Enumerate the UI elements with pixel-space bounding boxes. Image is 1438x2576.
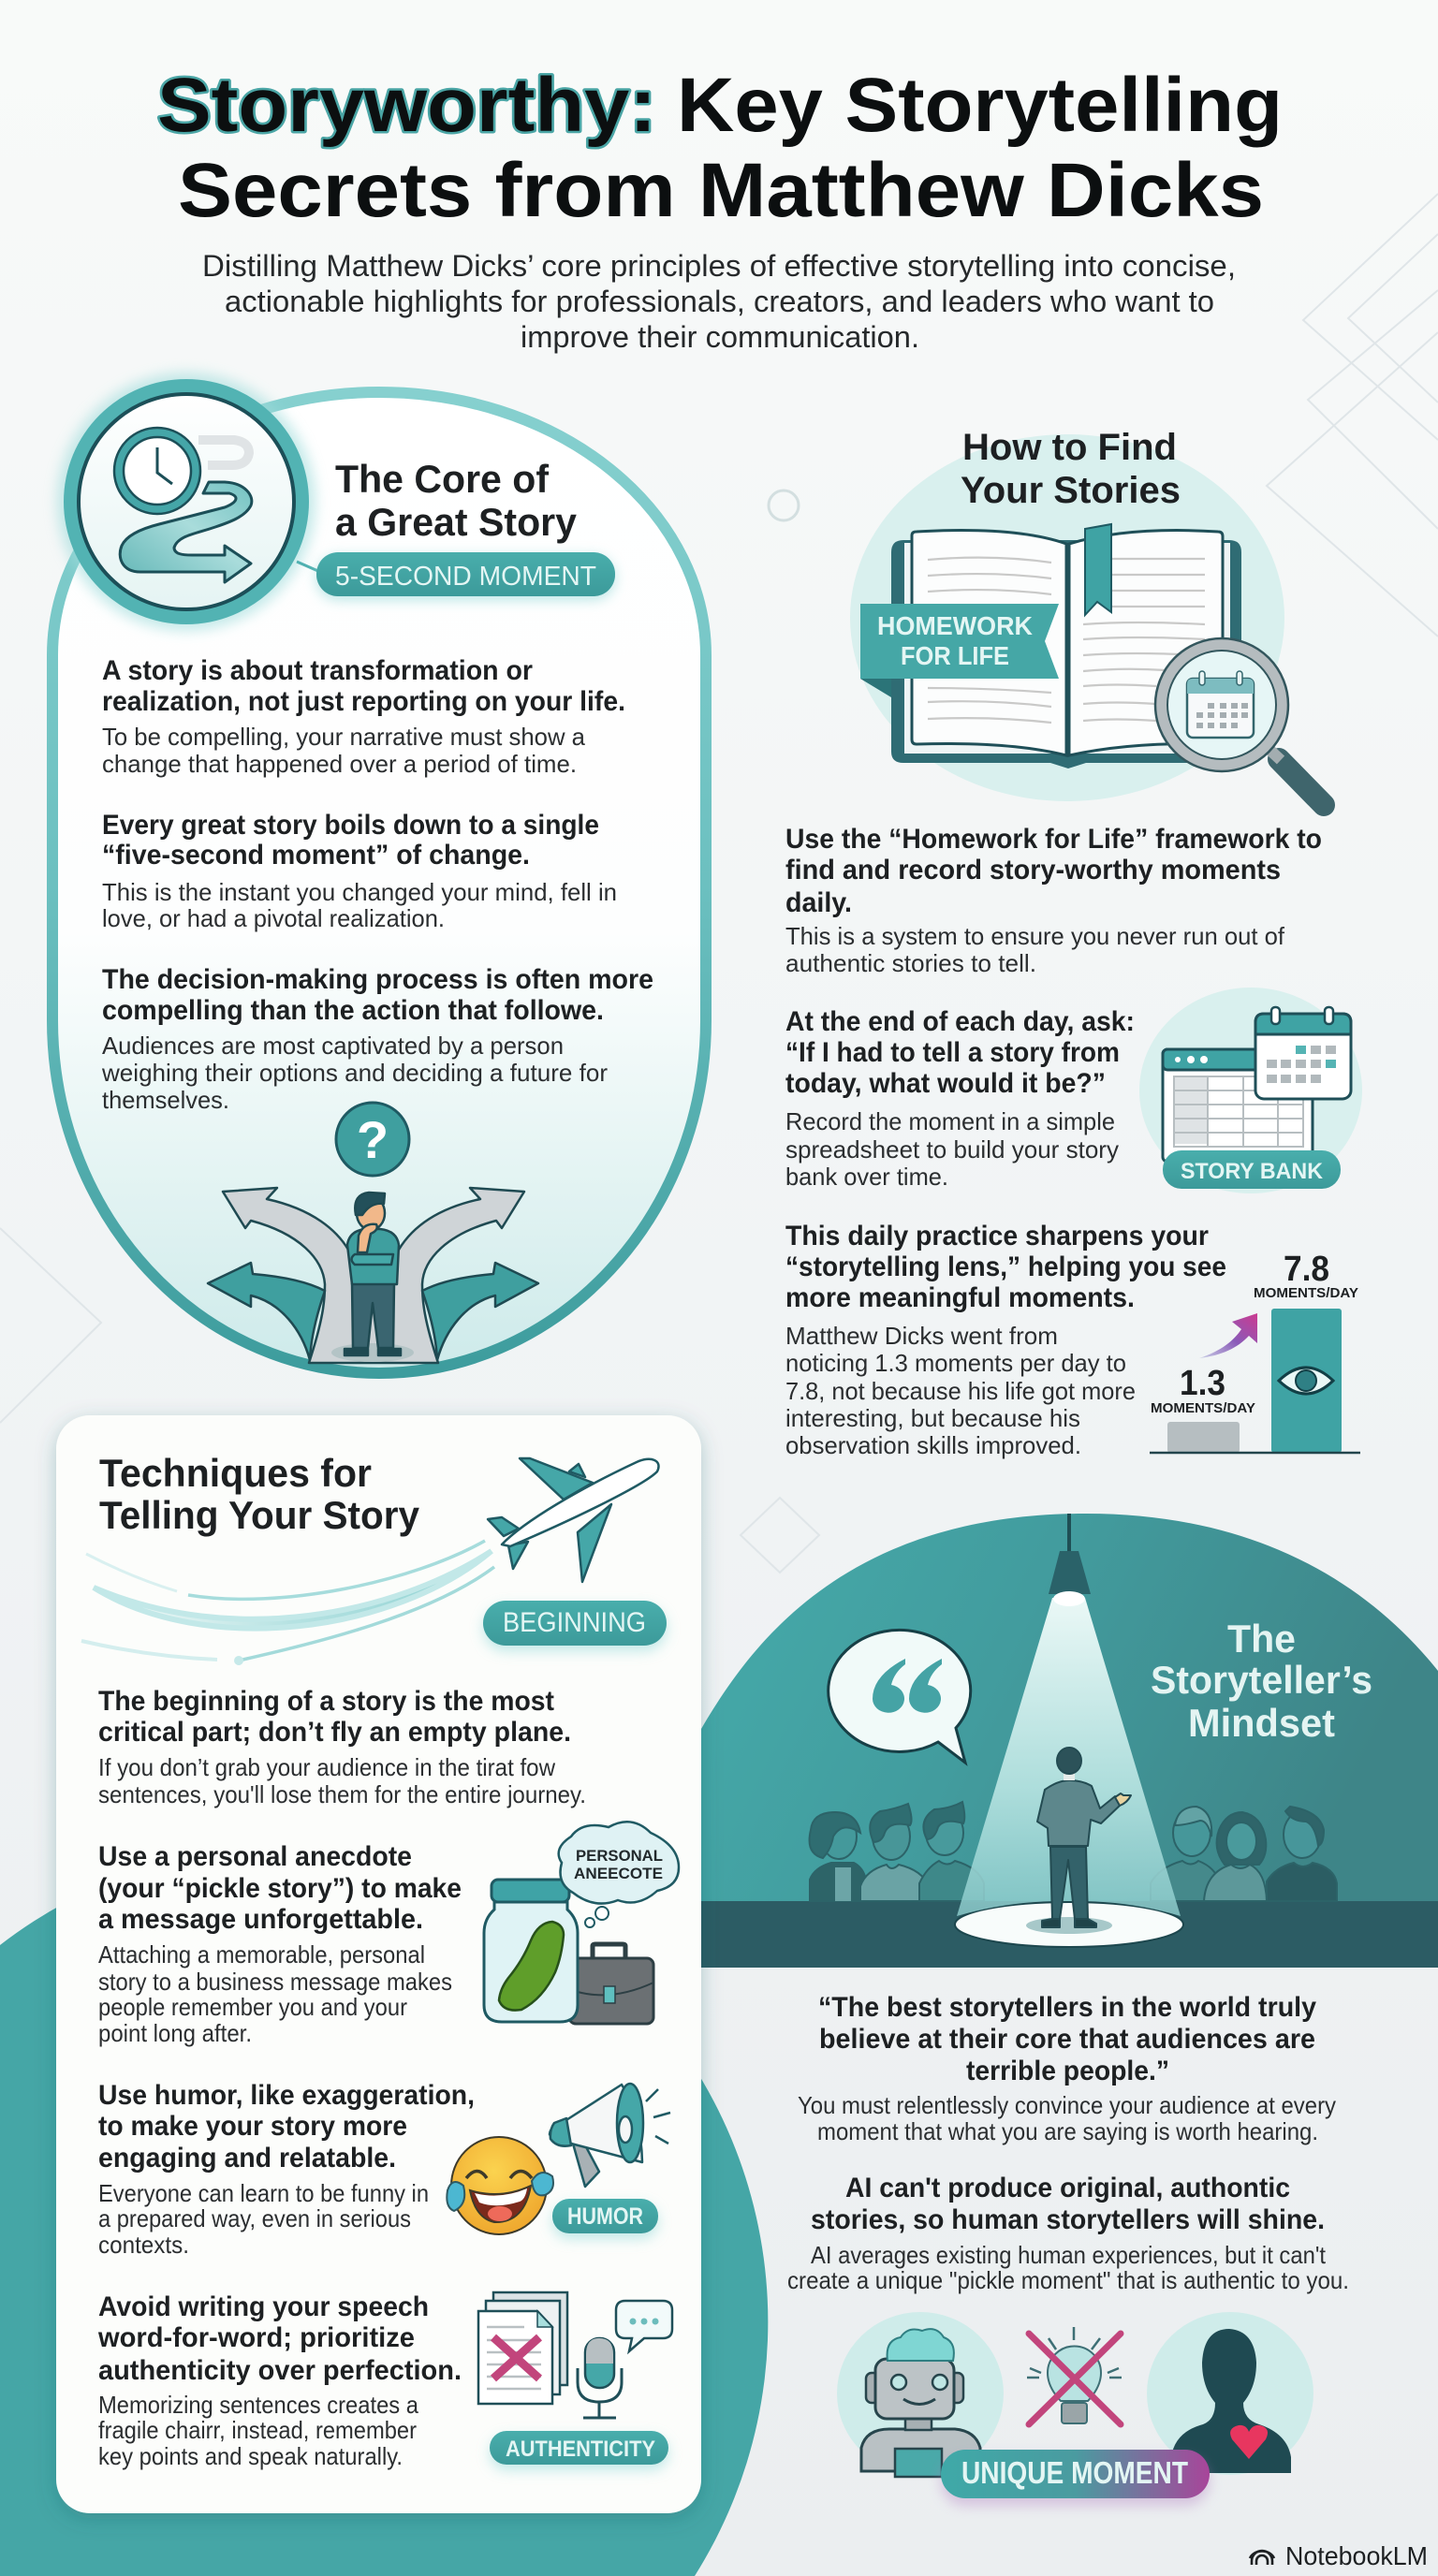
heading: the core of a great story: The Core of (335, 457, 550, 501)
icon: clock and winding path (57, 373, 320, 631)
text block: storytelling lens: Matthew Dicks went from (785, 1322, 1058, 1350)
dome background (655, 1514, 1438, 1910)
text block: quote: terrible people.” (966, 2056, 1169, 2086)
text block: beginning: critical part; don’t fly an empty plane. (98, 1717, 571, 1748)
text block: personal anecdote: point long after. (98, 2019, 252, 2047)
text block: storytelling lens: observation skills improved. (785, 1431, 1081, 1459)
text block: storytelling lens (785, 1221, 1226, 1459)
subtitle: actionable highlights for professionals, creators, and leaders who want to (225, 285, 1214, 318)
text block: homework for life: daily. (785, 887, 852, 918)
text block: storytelling lens: more meaningful moments. (785, 1282, 1135, 1313)
text block: quote (798, 1992, 1336, 2145)
illustration: story bank spreadsheet and calendar (1139, 988, 1362, 1193)
badge: story bank: STORY BANK (1181, 1159, 1324, 1184)
icon: robot with brain (837, 2312, 1004, 2477)
lamp and spotlight (955, 1514, 1183, 1947)
text block: five-second moment (102, 810, 617, 932)
speaker figure (1037, 1748, 1131, 1927)
heading: techniques: Telling Your Story (99, 1493, 420, 1537)
badge: story bank (1163, 1150, 1341, 1189)
text block: homework for life: authentic stories to tell. (785, 949, 1036, 977)
text block: storytelling lens: noticing 1.3 moments per day to (785, 1349, 1126, 1377)
text block: AI: stories, so human storytellers will shine. (811, 2204, 1325, 2235)
text block: five-second moment: “five-second moment” of change. (102, 840, 530, 871)
text block: homework for life: find and record story-worthy moments (785, 855, 1281, 886)
illustration: airplane and trails (81, 1458, 658, 1665)
text block: humor: engaging and relatable. (98, 2143, 396, 2174)
card (56, 1415, 701, 2513)
text block: homework for life (785, 824, 1322, 977)
text block: authenticity: Memorizing sentences creates a (98, 2391, 418, 2419)
text block: end of each day: bank over time. (785, 1163, 948, 1191)
heading: how to find your stories (961, 427, 1181, 511)
text block: end of each day: “If I had to tell a story from (785, 1037, 1120, 1068)
text block: decision-making (101, 964, 653, 1114)
teal circle behind techniques card (0, 1846, 768, 2576)
text block: transformation: To be compelling, your narrative must show a (102, 723, 586, 751)
text block: personal anecdote: people remember you and your (98, 1993, 407, 2021)
audience: right group (1151, 1807, 1337, 1901)
heading: the core of a great story (335, 457, 578, 544)
title: Secrets from Matthew Dicks (178, 148, 1264, 233)
text block: end of each day: today, what would it be?” (785, 1068, 1106, 1099)
text block: end of each day: At the end of each day, ask: (785, 1006, 1135, 1037)
banner: homework for life: HOMEWORK (877, 611, 1033, 640)
heading: the storyteller's mindset: The (1227, 1617, 1296, 1661)
text block: authenticity: Avoid writing your speech (98, 2291, 429, 2322)
icon: eye (1279, 1368, 1333, 1394)
text block: personal anecdote: story to a business message makes (98, 1968, 452, 1996)
thought bubble: personal anecdote: ANEECOTE (574, 1865, 663, 1882)
badge: 5-second moment: 5-SECOND MOMENT (335, 562, 596, 592)
heading: the storyteller's mindset: Mindset (1188, 1701, 1335, 1745)
icon: magnifying glass with calendar (1155, 638, 1324, 805)
title: Storyworthy: (157, 63, 656, 148)
subtitle: Distilling Matthew Dicks’ core principles of effective storytelling into concise, (202, 249, 1236, 283)
text block: personal anecdote (98, 1841, 462, 2047)
thought bubble: personal anecdote (559, 1822, 679, 1927)
panel outline (52, 392, 706, 1373)
text block: homework for life: This is a system to ensure you never run out of (785, 922, 1285, 950)
badge: unique moment (941, 2450, 1210, 2506)
panel: the storyteller's mindset (655, 1514, 1438, 2506)
text block: transformation: change that happened over a period of time. (102, 750, 577, 778)
audience: left group (810, 1802, 984, 1901)
icon: crossed-out script pages (478, 2292, 567, 2404)
chart: moments per day (1150, 1250, 1360, 1453)
badge: humor (552, 2199, 658, 2239)
text block: five-second moment: This is the instant you changed your mind, fell in (102, 878, 617, 906)
text block: authenticity (97, 2291, 462, 2470)
heading: how to find your stories: How to Find (962, 427, 1177, 468)
text block: humor: a prepared way, even in serious (98, 2204, 411, 2232)
text block: personal anecdote: Attaching a memorable, personal (98, 1940, 425, 1969)
badge: authenticity (490, 2431, 668, 2470)
icon: human silhouette with heart (1147, 2312, 1313, 2475)
text block: homework for life: Use the “Homework for Life” framework to (785, 824, 1322, 855)
text block: quote: “The best storytellers in the world truly (818, 1992, 1316, 2023)
text block: transformation (102, 655, 625, 778)
panel: techniques for telling your story (56, 1415, 701, 2513)
chart: moments per day: 1.3 (1180, 1364, 1225, 1403)
panel: how to find your stories (785, 427, 1362, 1459)
text block: personal anecdote: a message unforgettable. (98, 1904, 423, 1935)
chart: moments per day: 7.8 (1284, 1250, 1329, 1289)
text block: personal anecdote: (your “pickle story”) to make (98, 1873, 462, 1904)
subtitle (202, 249, 1236, 354)
thought bubble: personal anecdote: PERSONAL (576, 1847, 663, 1865)
badge: unique moment: UNIQUE MOMENT (961, 2455, 1188, 2490)
text block: decision-making: Audiences are most captivated by a person (102, 1032, 564, 1060)
chart: moments per day: MOMENTS/DAY (1254, 1285, 1358, 1301)
text block: quote: moment that what you are saying is worth hearing. (817, 2117, 1318, 2145)
badge: beginning (483, 1601, 667, 1651)
text block: decision-making: compelling than the action that followe. (102, 995, 604, 1026)
text block: humor: contexts. (98, 2231, 189, 2259)
text block: storytelling lens: “storytelling lens,” helping you see (785, 1251, 1226, 1282)
text block: quote: You must relentlessly convince your audience at every (798, 2091, 1336, 2119)
title (157, 63, 1283, 233)
chart: moments per day: MOMENTS/DAY (1151, 1400, 1255, 1416)
icon: question mark (336, 1103, 409, 1176)
text block: AI: AI can't produce original, authontic (845, 2173, 1290, 2203)
badge: humor: HUMOR (567, 2203, 643, 2230)
text block: storytelling lens: This daily practice sharpens your (785, 1221, 1209, 1251)
text block: humor: to make your story more (98, 2111, 407, 2142)
text block: five-second moment: love, or had a pivotal realization. (102, 904, 445, 932)
heading: the storyteller's mindset (1151, 1617, 1372, 1745)
badge: authenticity: AUTHENTICITY (506, 2437, 655, 2462)
text block: decision-making: weighing their options and deciding a future for (101, 1059, 608, 1087)
illustration: open book (891, 524, 1241, 768)
heading: the storyteller's mindset: Storyteller’s (1151, 1658, 1372, 1702)
stage floor (655, 1901, 1438, 1968)
text block: end of each day: Record the moment in a simple (785, 1107, 1115, 1135)
text block: quote: believe at their core that audiences are (819, 2024, 1315, 2055)
text block: authenticity: key points and speak naturally. (98, 2442, 403, 2470)
subtitle: improve their communication. (521, 320, 919, 354)
badge: beginning: BEGINNING (503, 1607, 646, 1638)
text block: AI: create a unique "pickle moment" that is authentic to you. (787, 2266, 1349, 2294)
logo: NotebookLM: NotebookLM (1285, 2541, 1428, 2570)
icon: megaphone (550, 2084, 670, 2187)
heading: the core of a great story: a Great Story (335, 500, 578, 544)
text block: beginning (98, 1686, 586, 1808)
title: Key Storytelling (677, 63, 1283, 148)
text block: decision-making: The decision-making process is often more (102, 964, 653, 995)
text block: storytelling lens: 7.8, not because his life got more (785, 1377, 1136, 1405)
text block: authenticity: authenticity over perfection. (98, 2355, 462, 2386)
text block: beginning: If you don’t grab your audience in the tirat fow (98, 1753, 555, 1781)
heading: techniques (99, 1451, 420, 1537)
icon: microphone and chat bubble (578, 2301, 672, 2418)
text block: beginning: sentences, you'll lose them for the entire journey. (98, 1780, 586, 1808)
text block: storytelling lens: interesting, but because his (785, 1404, 1080, 1432)
banner: homework for life: FOR LIFE (901, 641, 1009, 670)
text block: AI (787, 2173, 1349, 2294)
arrow: growth (1199, 1313, 1257, 1358)
illustration: person at crossroads (208, 1188, 538, 1363)
icon: laughing emoji (447, 2137, 553, 2234)
text block: transformation: realization, not just reporting on your life. (102, 686, 625, 717)
banner: homework for life (860, 604, 1059, 697)
icon: crossed-out light bulb (1027, 2327, 1122, 2424)
badge: 5-second moment (316, 552, 615, 600)
text block: humor: Use humor, like exaggeration, (98, 2080, 475, 2111)
text block: AI: AI averages existing human experiences, but it can't (811, 2241, 1327, 2269)
heading: techniques: Techniques for (99, 1451, 372, 1495)
text block: end of each day: spreadsheet to build your story (785, 1135, 1119, 1164)
text block: decision-making: themselves. (102, 1086, 229, 1114)
bookmark (1085, 524, 1111, 615)
text block: personal anecdote: Use a personal anecdote (98, 1841, 412, 1872)
text block: five-second moment: Every great story boils down to a single (102, 810, 599, 841)
illustration: pickle jar and briefcase (484, 1880, 653, 2024)
text block: authenticity: word-for-word; prioritize (97, 2322, 415, 2353)
text block: transformation: A story is about transformation or (102, 655, 533, 686)
heading: how to find your stories: Your Stories (961, 470, 1181, 511)
icon: question mark: ? (357, 1110, 389, 1169)
text block: end of each day (785, 1006, 1135, 1191)
decorative circle behind book (850, 434, 1284, 801)
panel: the core of a great story (52, 373, 706, 1373)
text block: beginning: The beginning of a story is the most (98, 1686, 554, 1717)
text block: humor: Everyone can learn to be funny in (98, 2179, 429, 2207)
text block: authenticity: fragile chairr, instead, remember (98, 2416, 417, 2444)
text block: humor (98, 2080, 475, 2259)
icon: speech bubble with quote marks (829, 1630, 971, 1763)
